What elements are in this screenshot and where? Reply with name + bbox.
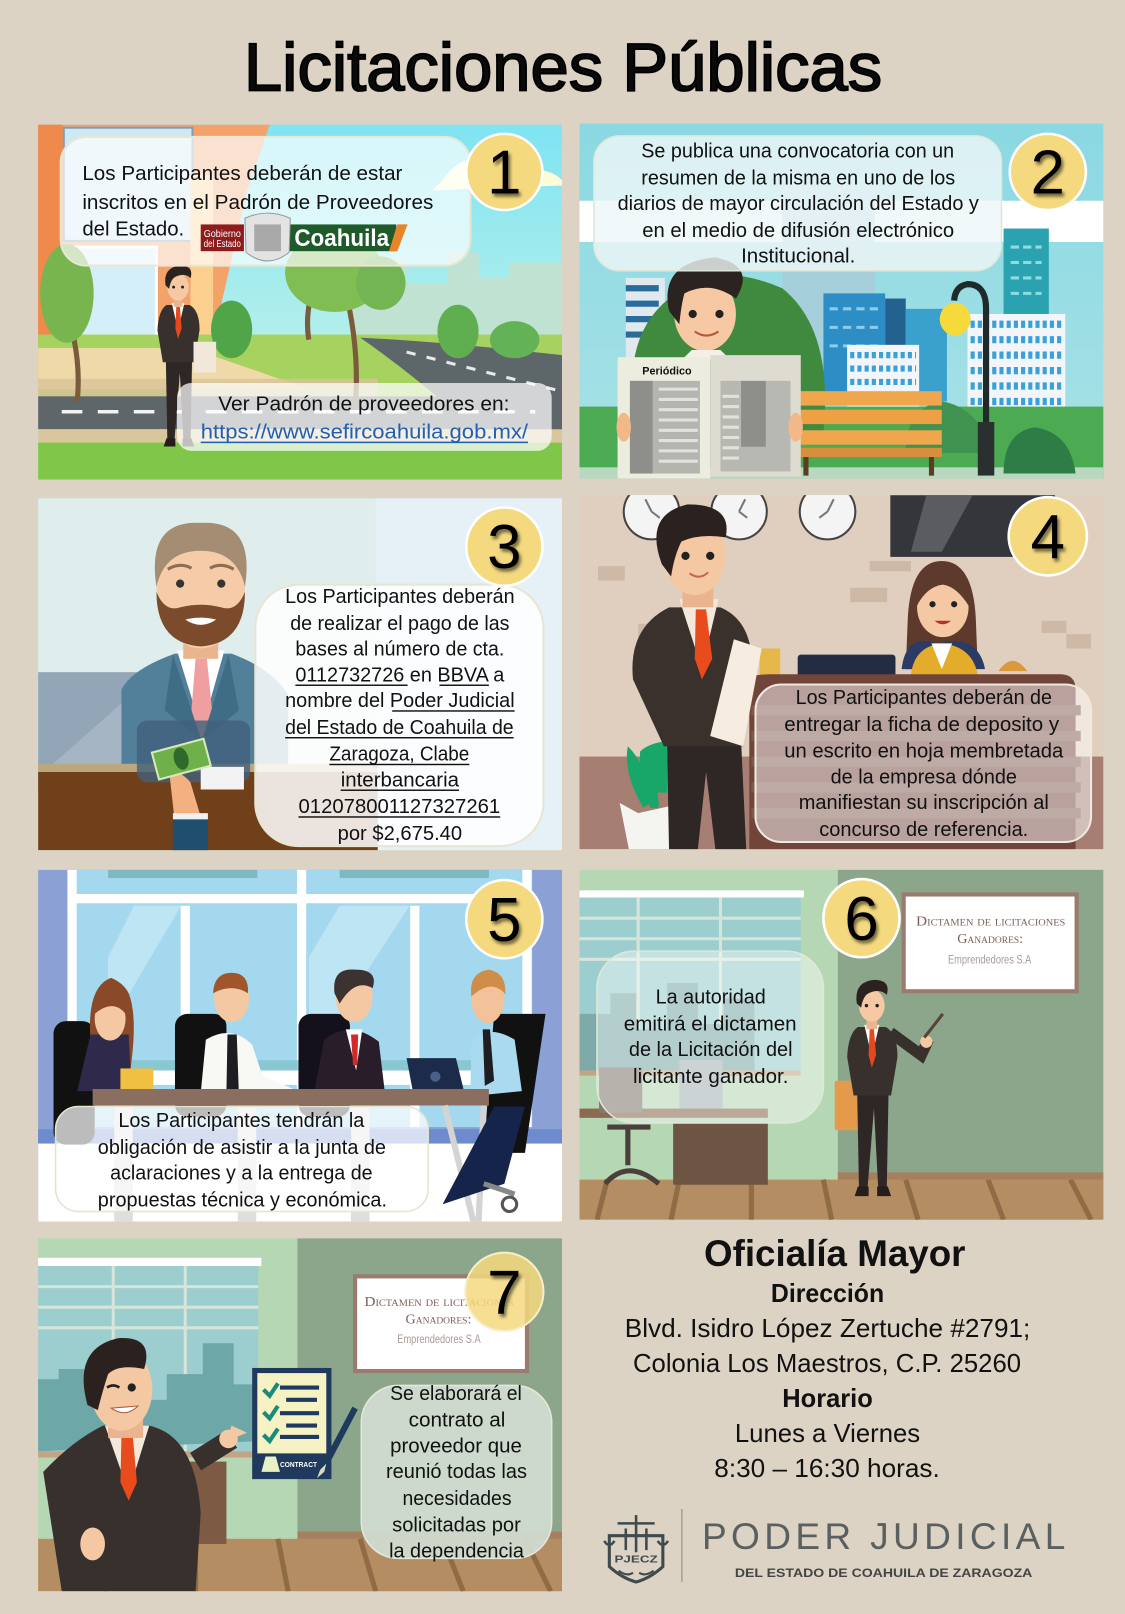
panel 4: entrega de ficha — [579, 484, 1103, 849]
callout: datos de pago: de realizar el pago de las — [290, 612, 509, 635]
callout: ficha de depósito — [755, 685, 1091, 842]
callout: datos de pago: interbancaria — [341, 768, 460, 791]
number badge 7 — [465, 1253, 543, 1331]
callout: junta de aclaraciones: aclaraciones y a la entrega de — [110, 1162, 373, 1185]
contact block: Oficialía Mayor: Lunes a Viernes — [735, 1420, 920, 1448]
callout: contrato: Se elaborará el — [390, 1382, 522, 1405]
callout: junta de aclaraciones: propuestas técnica y económica. — [98, 1188, 387, 1211]
contact block: Oficialía Mayor: Oficialía Mayor — [704, 1232, 965, 1274]
panel 2: publicación de convocatoria — [579, 124, 1103, 479]
callout: ficha de depósito: de la empresa dónde — [831, 765, 1017, 788]
logo: Gobierno del Estado Coahuila: del Estado — [204, 239, 241, 250]
number badge 6: 6 — [844, 885, 879, 954]
callout: ficha de depósito: Los Participantes deberán de — [796, 686, 1052, 709]
callout: datos de pago: nombre del Poder Judicial — [285, 689, 515, 712]
callout: convocatoria: diarios de mayor circulación del Estado y — [618, 192, 980, 215]
scene 1: street with building and man — [38, 125, 566, 480]
logo: Gobierno del Estado Coahuila: Coahuila — [294, 226, 390, 252]
callout: ficha de depósito: entregar la ficha de deposito y — [784, 713, 1060, 736]
contact block: Oficialía Mayor: Dirección — [771, 1280, 884, 1308]
callout: ver padrón: Ver Padrón de proveedores en: — [218, 393, 509, 416]
callout: contrato: necesidades — [402, 1487, 512, 1510]
logo: Gobierno del Estado Coahuila: Gobierno — [204, 229, 241, 240]
scene 6: office with man presenting sign — [579, 870, 1103, 1220]
number badge 4 — [1009, 497, 1087, 575]
callout: dictamen — [597, 951, 823, 1123]
panel 5: junta de aclaraciones — [38, 870, 562, 1222]
callout: dictamen: de la Licitación del — [629, 1038, 793, 1061]
contact block: Oficialía Mayor: Horario — [782, 1385, 873, 1413]
scene 2: park with city and man reading newspaper — [579, 124, 1103, 479]
number badge 3 — [466, 507, 542, 586]
number badge 5 — [466, 880, 542, 958]
callout: datos de pago: 0112732726 en BBVA a — [295, 663, 505, 686]
callout: datos de pago: 012078001127327261 — [298, 795, 500, 818]
logo: Poder Judicial — [604, 1509, 1065, 1582]
callout: contrato: solicitadas por — [392, 1514, 521, 1537]
callout: convocatoria: Se publica una convocatoria con un — [641, 140, 954, 163]
logo: Gobierno del Estado Coahuila — [201, 213, 408, 261]
callout: datos de pago: bases al número de cta. — [295, 638, 504, 661]
callout: convocatoria: en el medio de difusión electrónico — [642, 219, 954, 242]
scene 6: office with man presenting sign: Emprendedores S.A — [948, 952, 1032, 966]
scene 2: park with city and man reading newspaper: Periódico — [642, 366, 692, 378]
callout: datos de pago: del Estado de Coahuila de — [285, 716, 514, 739]
contact block: Oficialía Mayor: Colonia Los Maestros, C.P. 25260 — [633, 1350, 1021, 1378]
logo: Poder Judicial: PODER JUDICIAL — [702, 1515, 1065, 1557]
callout: datos de pago — [255, 585, 543, 846]
callout: dictamen: licitante ganador. — [633, 1065, 788, 1088]
number badge 1 — [466, 134, 542, 210]
scene 6: office with man presenting sign: Ganadores: — [957, 931, 1023, 946]
callout: junta de aclaraciones: obligación de asistir a la junta de — [98, 1136, 386, 1159]
callout: contrato: proveedor que — [390, 1434, 522, 1457]
callout: contrato: contrato al — [409, 1409, 505, 1432]
callout: ficha de depósito: concurso de referencia. — [819, 818, 1028, 841]
panel 1: registro en padrón — [38, 125, 566, 480]
callout: ver padrón: https://www.sefircoahuila.gob.mx/ — [201, 421, 528, 444]
icon: PJECZ shield — [604, 1515, 668, 1582]
contact block: Oficialía Mayor: Blvd. Isidro López Zertuche #2791; — [625, 1315, 1030, 1343]
callout: ficha de depósito: manifiestan su inscripción al — [799, 791, 1049, 814]
callout: datos de pago: por $2,675.40 — [338, 822, 462, 845]
callout: junta de aclaraciones — [56, 1107, 428, 1212]
scene 6: office with man presenting sign: Dictamen de licitaciones — [916, 913, 1065, 928]
title: Licitaciones Públicas — [244, 31, 882, 106]
callout: dictamen: emitirá el dictamen — [624, 1012, 797, 1035]
callout: contrato: reunió todas las — [386, 1460, 527, 1483]
callout: convocatoria: resumen de la misma en uno de los — [641, 166, 955, 189]
callout: datos de pago: Los Participantes deberán — [285, 585, 515, 608]
callout: convocatoria: Institucional. — [741, 245, 855, 268]
icon: PJECZ shield: PJECZ — [614, 1554, 658, 1565]
callout: contrato: la dependencia — [389, 1539, 524, 1562]
logo: Poder Judicial: DEL ESTADO DE COAHUILA DE ZARAGOZA — [735, 1566, 1032, 1580]
scene 7: office with man pointing at contract: Ganadores: — [406, 1312, 471, 1327]
callout: convocatoria — [594, 136, 1001, 271]
scene 7: office with man pointing at contract: Emprendedores S.A — [397, 1332, 481, 1346]
callout: requisito de inscripción: del Estado. — [82, 218, 184, 241]
panel 7: contrato — [38, 1238, 562, 1591]
scene 7: office with man pointing at contract — [38, 1238, 562, 1591]
callout: requisito de inscripción: Los Participantes deberán de estar — [82, 162, 403, 185]
scene 7: office with man pointing at contract: Dictamen de licitaciones — [364, 1294, 514, 1309]
callout: contrato — [361, 1382, 552, 1562]
scene 5: meeting room with four people — [38, 870, 562, 1222]
contact block: Oficialía Mayor: 8:30 – 16:30 horas. — [714, 1455, 940, 1483]
number badge 1: 1 — [487, 139, 522, 208]
number badge 4: 4 — [1031, 503, 1065, 572]
number badge 2 — [1010, 134, 1086, 210]
callout: junta de aclaraciones: Los Participantes tendrán la — [118, 1109, 365, 1132]
callout: requisito de inscripción: inscritos en el Padrón de Proveedores — [82, 191, 433, 214]
panel 6: dictamen — [579, 870, 1103, 1220]
callout: datos de pago: Zaragoza, Clabe — [329, 743, 469, 766]
scene 7: office with man pointing at contract: CONTRACT — [280, 1460, 318, 1469]
panel 3: pago de bases — [38, 498, 562, 850]
callout: ficha de depósito: un escrito en hoja membretada — [784, 740, 1064, 763]
callout: dictamen: La autoridad — [656, 986, 766, 1009]
contact block: Oficialía Mayor — [625, 1232, 1030, 1483]
number badge 7: 7 — [487, 1258, 522, 1327]
scene 4: reception with man, receptionist and clocks — [579, 484, 1103, 849]
callout: requisito de inscripción — [61, 137, 470, 266]
number badge 3: 3 — [487, 513, 522, 582]
callout: ver padrón — [177, 383, 552, 451]
scene 3: bank teller and hand with bill — [38, 498, 562, 850]
number badge 5: 5 — [487, 886, 522, 955]
number badge 2: 2 — [1031, 139, 1065, 208]
number badge 6 — [823, 879, 900, 957]
